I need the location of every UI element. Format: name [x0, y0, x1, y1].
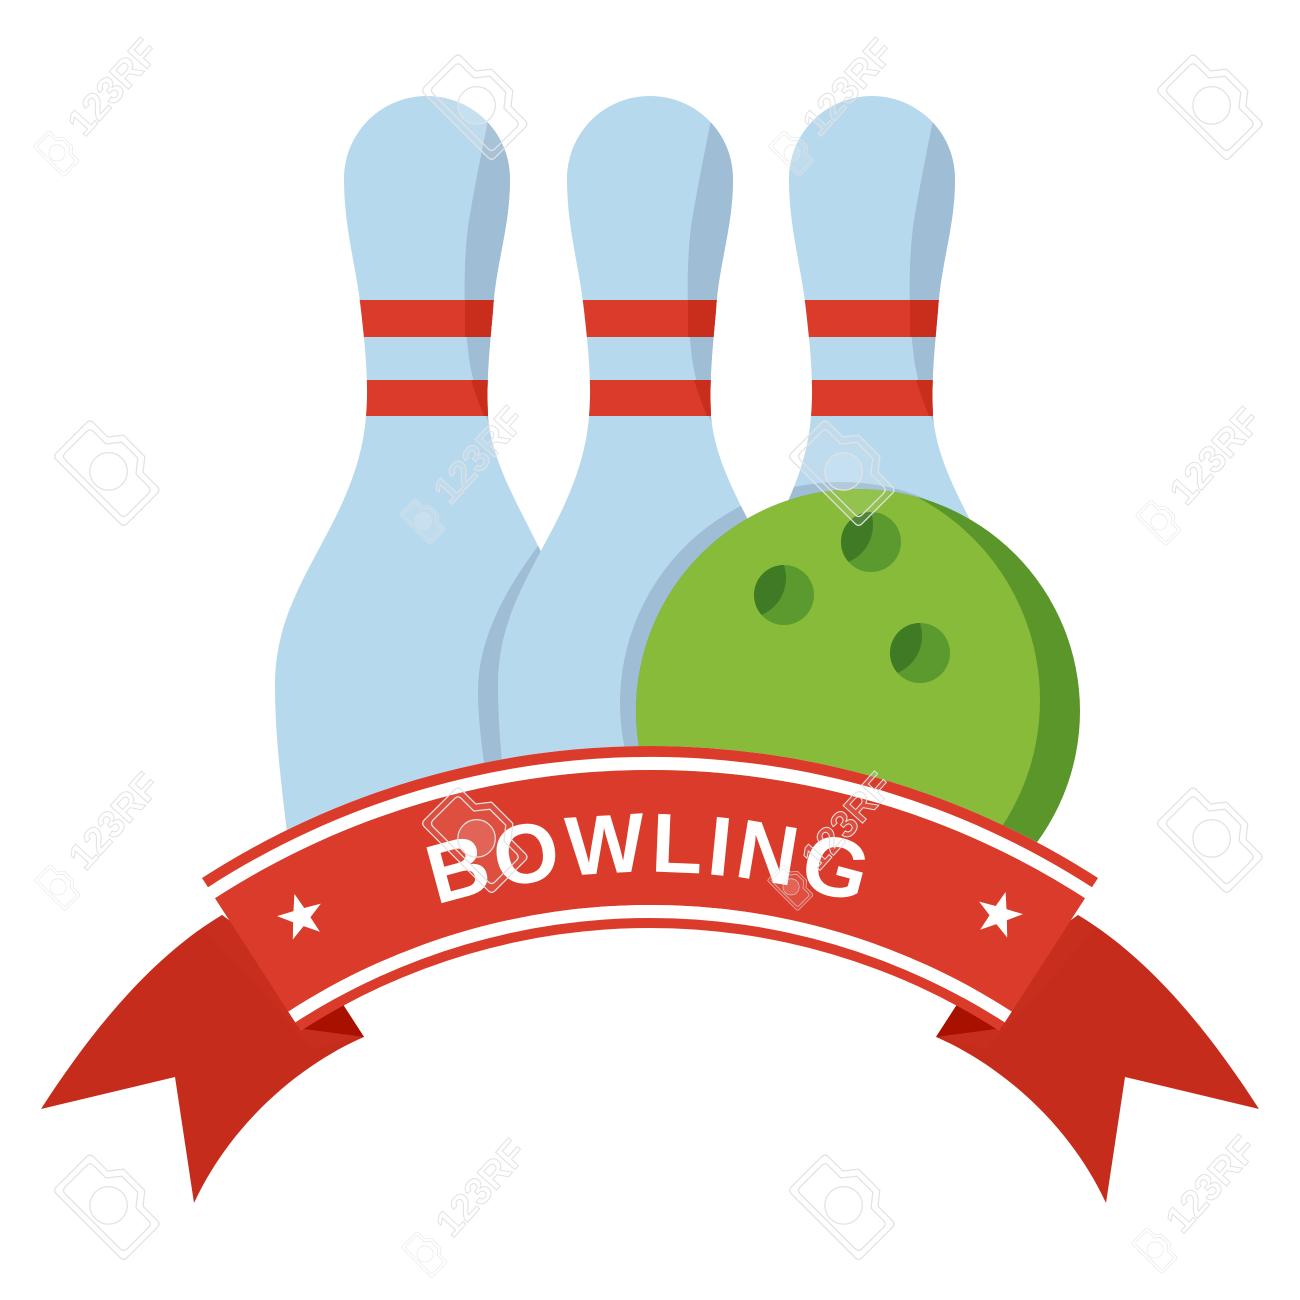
banner title: BOWLING	[426, 813, 865, 904]
bowling pin: left	[275, 96, 580, 900]
ball shadow on pins	[620, 482, 931, 746]
ribbon tail: left	[41, 915, 364, 1203]
star: left	[272, 888, 328, 942]
ribbon banner	[202, 746, 1098, 1031]
bowling pin: centre	[498, 96, 803, 900]
finger hole 3	[890, 623, 950, 683]
bowling pin: right	[720, 96, 1025, 900]
finger hole 2	[841, 512, 901, 572]
ribbon tail: right	[936, 915, 1259, 1203]
bowling ball	[636, 489, 1080, 932]
finger hole 1	[754, 565, 814, 625]
star: right	[972, 886, 1028, 940]
shadow of centre pin on left pin	[478, 546, 540, 762]
